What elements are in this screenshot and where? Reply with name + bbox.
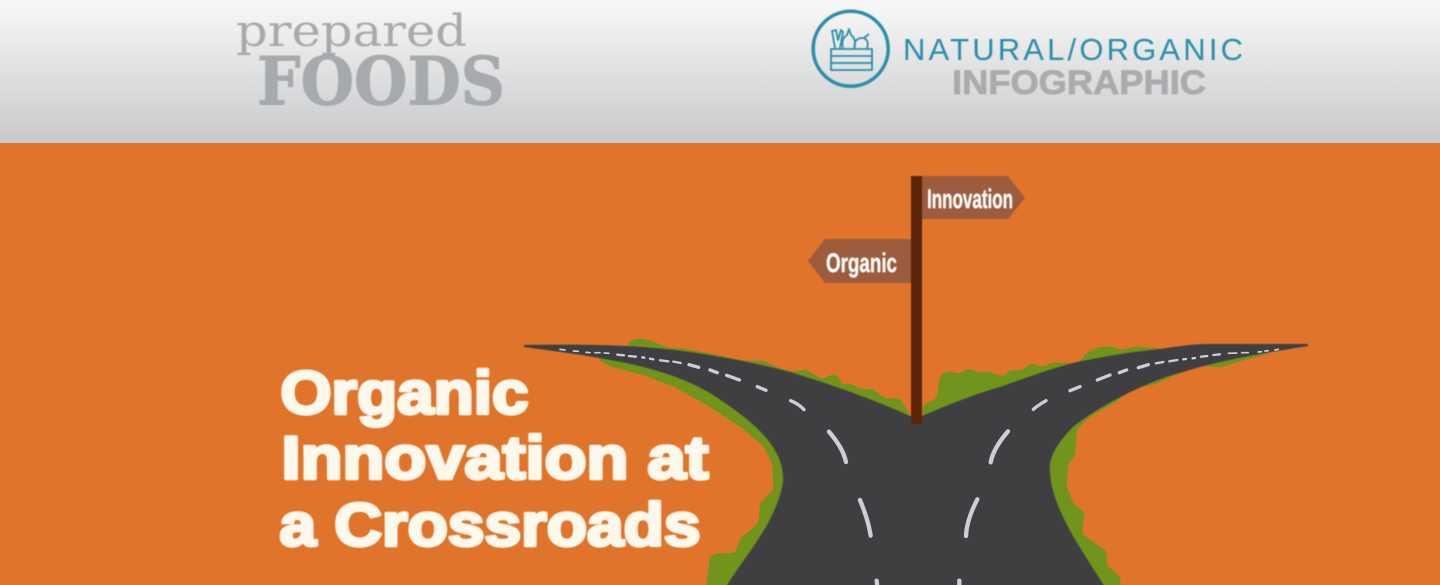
sign: Innovation: Innovation	[927, 184, 1013, 214]
logo: Prepared Foods	[236, 6, 505, 120]
heading: Infographic: INFOGRAPHIC	[952, 64, 1206, 102]
bushes: left lower	[597, 353, 793, 585]
title: Innovation at	[282, 425, 709, 492]
heading: Natural/Organic: NATURAL/ORGANIC	[903, 32, 1243, 67]
bushes: right lower	[1033, 350, 1293, 585]
signpost	[808, 176, 1025, 424]
sign: Organic: Organic	[826, 248, 897, 278]
icon: produce crate in circle	[813, 11, 888, 86]
panel: orange background	[0, 142, 1440, 585]
title: Organic	[280, 360, 528, 426]
logo: Prepared Foods: prepared	[236, 6, 467, 57]
title	[280, 360, 709, 558]
illustration: forked road	[524, 344, 1308, 585]
title: a Crossroads	[280, 492, 700, 558]
panel: grey header band	[0, 0, 1440, 143]
signpost pole	[911, 176, 922, 424]
road markings: right branch	[959, 349, 1278, 585]
bushes: right upper	[922, 347, 1167, 427]
illustration: green roadside bushes	[597, 338, 1293, 585]
logo: Prepared Foods: FOODS	[257, 42, 505, 120]
sign: Organic	[808, 239, 911, 283]
road markings: left branch	[560, 349, 877, 585]
sign: Innovation	[921, 176, 1025, 219]
bushes: left upper	[625, 338, 910, 427]
